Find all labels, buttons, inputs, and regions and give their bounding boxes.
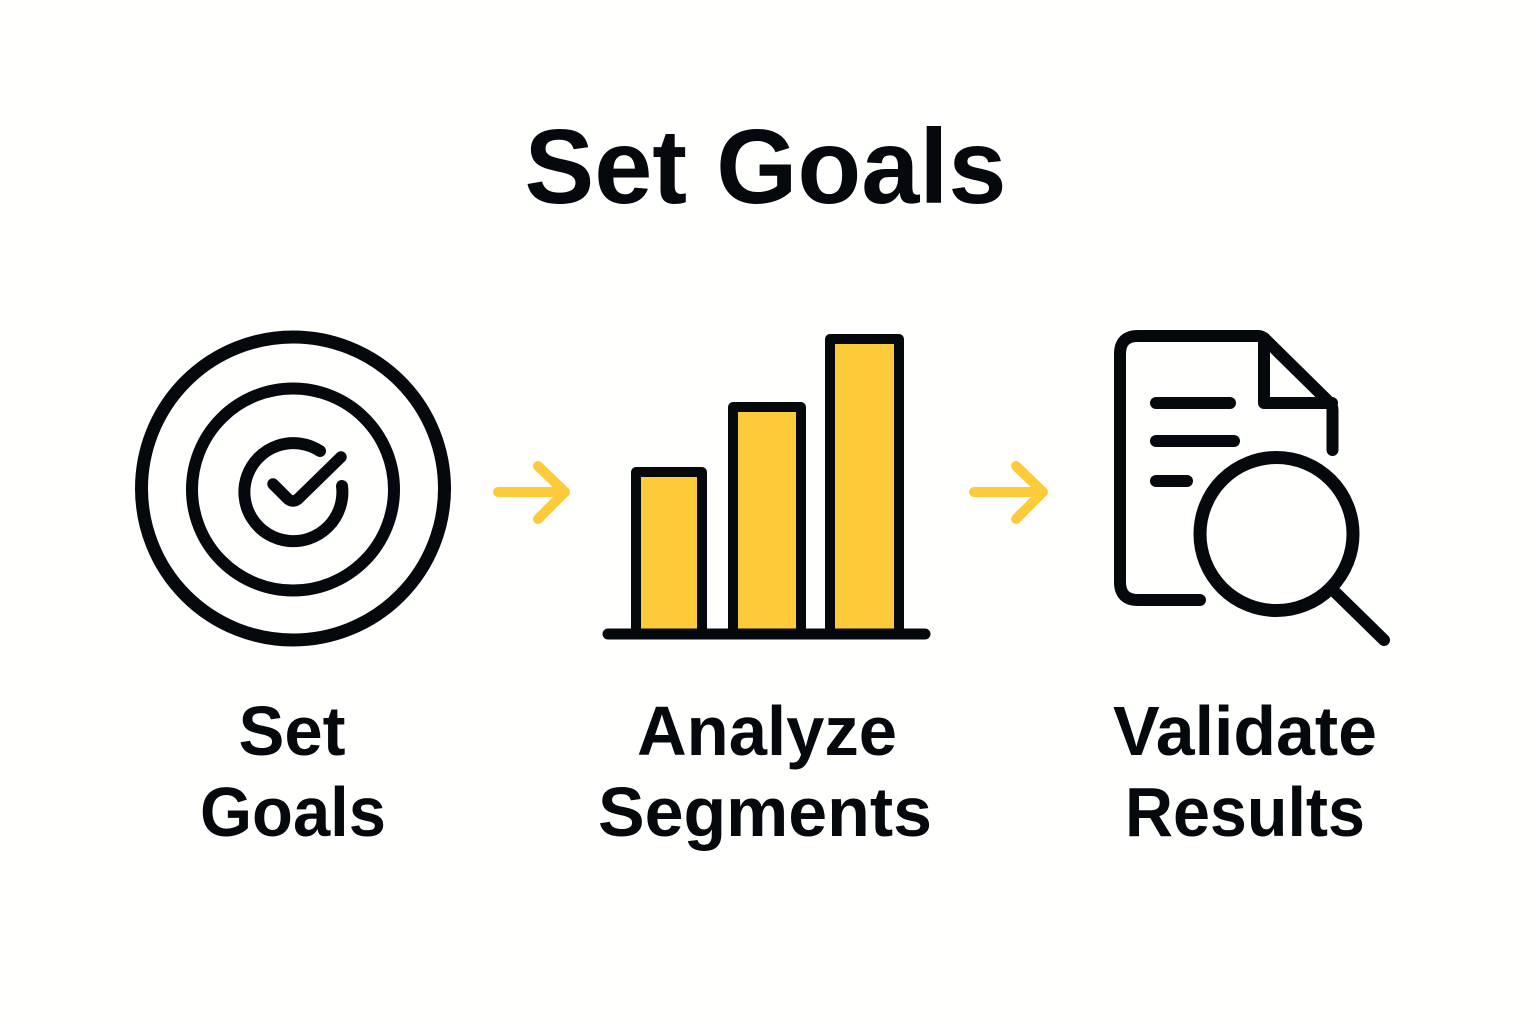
icon: bar chart	[608, 339, 925, 634]
label: validate results: Results	[1125, 773, 1365, 851]
arrow: goals to segments	[498, 466, 565, 519]
label: analyze segments: Analyze	[637, 692, 897, 770]
label: set goals	[200, 692, 386, 851]
label: analyze segments: Segments	[598, 773, 932, 851]
icon: target with check	[142, 337, 444, 640]
label: validate results	[1113, 692, 1377, 851]
label: analyze segments	[598, 692, 932, 851]
label: validate results: Validate	[1113, 692, 1377, 770]
label: set goals: Set	[238, 692, 346, 770]
title: Set Goals	[524, 108, 1006, 226]
label: set goals: Goals	[200, 773, 386, 851]
arrow: segments to results	[974, 466, 1043, 519]
icon: document with magnifier	[1120, 336, 1384, 640]
